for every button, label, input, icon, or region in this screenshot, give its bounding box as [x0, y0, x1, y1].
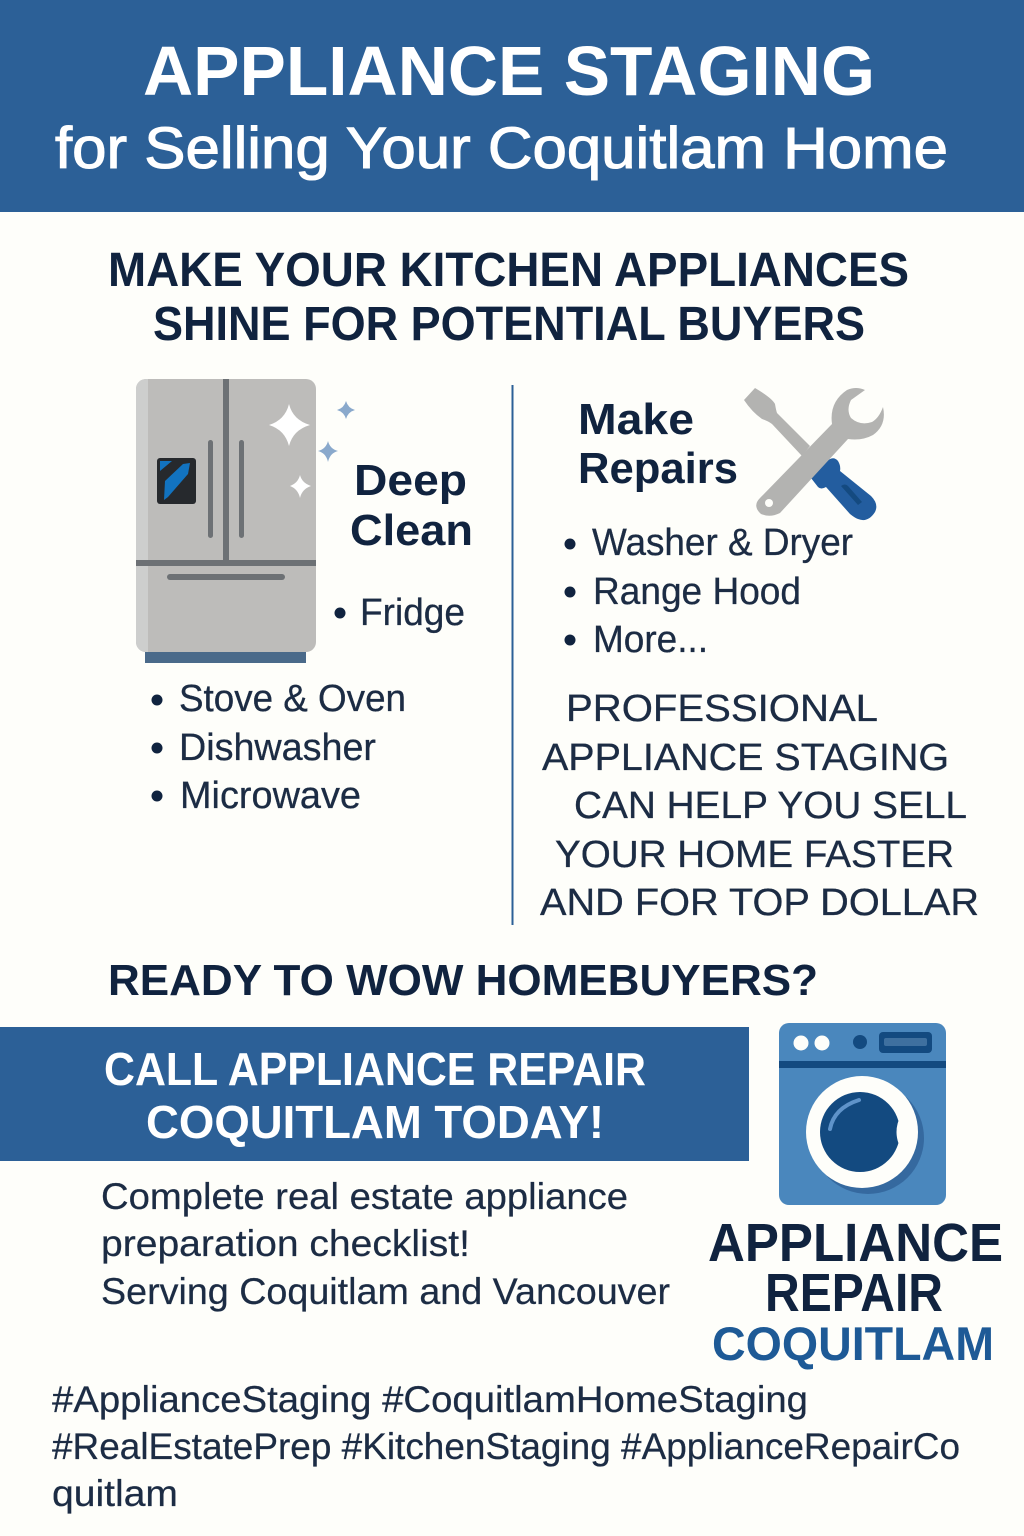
heading: deep clean: Deep	[354, 456, 467, 505]
title: APPLIANCE STAGING	[143, 32, 875, 110]
panel: deep clean	[136, 379, 473, 817]
logo text: APPLIANCE	[708, 1213, 1003, 1273]
text block: checklist and service area: Serving Coquitlam and Vancouver	[101, 1271, 670, 1312]
main heading	[108, 244, 909, 351]
hashtags: quitlam	[52, 1473, 178, 1514]
text block: professional staging message: YOUR HOME FASTER	[555, 834, 954, 876]
text block: checklist and service area: Complete real estate appliance	[101, 1176, 628, 1217]
hashtags: #ApplianceStaging #CoquitlamHomeStaging	[52, 1379, 808, 1420]
call to action banner	[0, 1027, 749, 1161]
text block: professional staging message: CAN HELP YOU SELL	[574, 785, 967, 827]
call to action banner: COQUITLAM TODAY!	[146, 1096, 604, 1148]
hashtags: #RealEstatePrep #KitchenStaging #ApplianceRepairCo	[52, 1426, 960, 1467]
icon: sparkles	[269, 401, 355, 498]
heading: make repairs: Repairs	[578, 444, 738, 493]
list: deep clean items: Dishwasher	[179, 727, 376, 769]
text block: professional staging message: PROFESSIONAL	[566, 688, 878, 730]
heading: deep clean	[350, 456, 473, 555]
text block: professional staging message	[540, 688, 979, 924]
heading: make repairs: Make	[578, 395, 694, 444]
heading: deep clean: Clean	[350, 506, 473, 555]
main heading: MAKE YOUR KITCHEN APPLIANCES	[108, 244, 909, 297]
list: repair items: Washer & Dryer	[592, 522, 853, 564]
list: deep clean items: Microwave	[180, 775, 361, 817]
text block: checklist and service area: preparation checklist!	[101, 1223, 470, 1264]
subtitle: for Selling Your Coquitlam Home	[55, 116, 948, 181]
logo text	[708, 1213, 1003, 1370]
call to action banner: CALL APPLIANCE REPAIR	[104, 1043, 646, 1095]
logo text: COQUITLAM	[712, 1317, 994, 1370]
list: deep clean items: Fridge	[360, 592, 465, 634]
text block: checklist and service area	[101, 1176, 670, 1312]
list: deep clean items: Stove & Oven	[179, 678, 406, 720]
list: repair items	[564, 522, 853, 661]
list: repair items: More...	[593, 619, 708, 661]
list: repair items: Range Hood	[593, 571, 801, 613]
heading: ready to wow: READY TO WOW HOMEBUYERS?	[108, 956, 818, 1005]
icon: washing machine	[779, 1023, 946, 1205]
list: deep clean items	[152, 592, 465, 817]
logo text: REPAIR	[765, 1263, 943, 1323]
header banner	[0, 0, 1024, 212]
text block: professional staging message: APPLIANCE STAGING	[542, 737, 949, 779]
hashtags	[52, 1379, 960, 1514]
heading: make repairs	[578, 395, 738, 493]
text block: professional staging message: AND FOR TOP DOLLAR	[540, 882, 979, 924]
icon: wrench and screwdriver	[744, 388, 884, 520]
icon: fridge	[136, 379, 316, 663]
panel: make repairs	[540, 388, 979, 924]
main heading: SHINE FOR POTENTIAL BUYERS	[153, 298, 865, 351]
